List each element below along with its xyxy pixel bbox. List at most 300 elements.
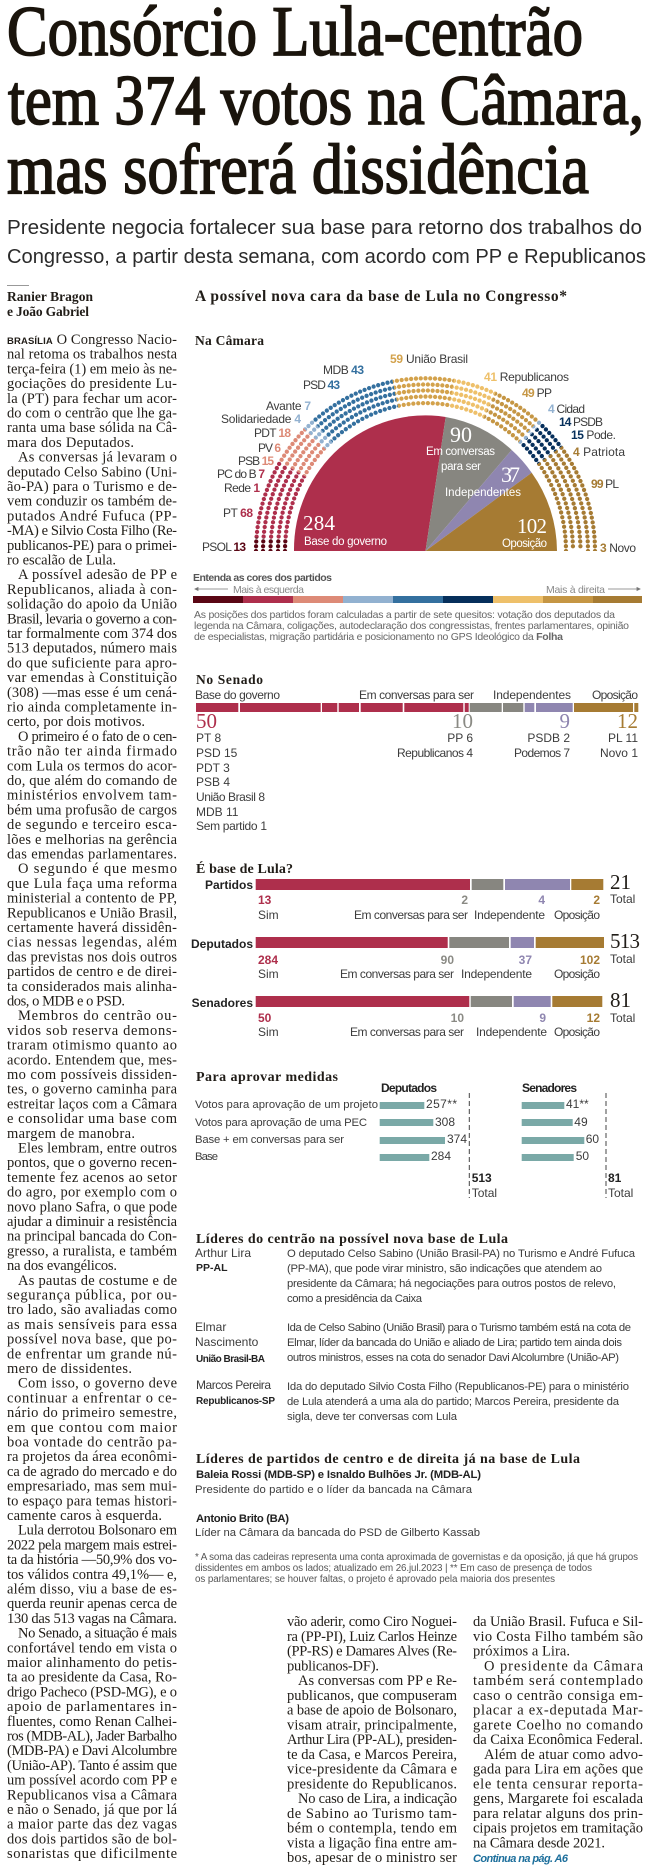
article column 1: querda reunir apenas cerca de — [7, 1596, 177, 1612]
panel: para aprovar medidas: Senadores — [522, 1081, 577, 1095]
article column 1: ministérios envolvem tam- — [7, 788, 177, 804]
footnote: * A soma das cadeiras representa uma conta aproximada de governistas e da oposição, já que há grupos — [195, 1552, 638, 1563]
row: deputados: Independente — [461, 967, 532, 981]
panel: para aprovar medidas: Votos para aprovação de uma PEC — [195, 1117, 367, 1129]
party labels around the hemicycle: 14 PSDB — [559, 415, 603, 429]
panel: no Senado: PP 6 — [447, 731, 473, 745]
article column 1: vem conduzir os também de- — [7, 494, 177, 510]
article column 1: na principal bancada do Con- — [7, 1229, 177, 1245]
article column 1: putados André Fufuca (PP- — [7, 508, 177, 524]
panel: líderes do centrão: sigla, deve ter conversas com Lula — [287, 1411, 458, 1423]
panel: no Senado: PSD 15 — [196, 746, 238, 760]
pie labels: Base do governo — [304, 536, 387, 548]
article column 3: O presidente da Câmara — [484, 1658, 644, 1674]
panel: no Senado: Em conversas para ser — [359, 688, 474, 702]
row: deputados: Total — [610, 952, 635, 966]
headline — [7, 0, 644, 209]
panel: líderes do centrão: O deputado Celso Sabino (União Brasil-PA) no Turismo e André Fufuca — [287, 1248, 636, 1260]
article column 2: As conversas com PP e Re- — [298, 1673, 457, 1689]
article column 1: continuar a enfrentar o ce- — [7, 1390, 177, 1406]
article column 1: das emendas parlamentares. — [7, 846, 177, 862]
article column 1: Republicanos visa a Câmara — [7, 1787, 178, 1803]
panel: líderes do centrão: de Lula atenderá a uma ala do partido; Marcos Pereira, presidente da — [287, 1396, 620, 1408]
article column 1: certamente haverá dissidên- — [7, 920, 177, 936]
panel: no Senado: 50 — [196, 709, 217, 733]
article column 1: -MA) e Silvio Costa Filho (Re- — [7, 523, 177, 539]
panel: no Senado — [195, 672, 638, 833]
pie labels: 284 — [303, 511, 336, 535]
footnote: dissidentes em ambos os lados; atualizado em 26.jul.2023 | ** Em caso de presença de todos — [195, 1563, 592, 1574]
article column 1: (MDB-PA) e Davi Alcolumbre — [7, 1743, 177, 1759]
article column 1: ta da história —50,9% dos vo- — [7, 1552, 177, 1568]
row: senadores: Total — [610, 1011, 635, 1025]
article column 1: O segundo é que mesmo — [18, 861, 177, 877]
article column 3 — [473, 1614, 644, 1851]
article column 1: gresso, a ruralista, e também — [7, 1243, 178, 1259]
article column 1: ros (MDB-AL), Jader Barbalho — [7, 1728, 177, 1744]
deck subtitle: Congresso, a partir desta semana, com acordo com PP e Republicanos — [7, 246, 646, 268]
panel: líderes do centrão: União Brasil-BA — [196, 1354, 265, 1365]
panel: líderes de partidos — [195, 1452, 580, 1539]
panel: líderes do centrão: Marcos Pereira — [196, 1378, 271, 1392]
panel: no Senado: União Brasil 8 — [196, 790, 265, 804]
article column 3: placar a ex-deputada Mar- — [473, 1702, 643, 1718]
bars: senadores: 49 — [574, 1115, 588, 1129]
panel: líderes de partidos: Líderes de partidos de centro e de direita já na base de Lula — [196, 1452, 580, 1467]
row: deputados: 90 — [441, 953, 454, 967]
row: partidos: Independente — [474, 908, 545, 922]
panel: é base de Lula: É base de Lula? — [196, 860, 293, 877]
article column 2: Arthur Lira (PP-AL), presiden- — [287, 1732, 457, 1748]
article column 1: novo plano Safra, o que pode — [7, 1199, 177, 1215]
article column 2: vista a ligação fina entre am- — [287, 1835, 457, 1851]
legend: party colours — [193, 572, 642, 643]
article column 1: tes, o governo caminha para — [7, 1082, 178, 1098]
article column 1: fluentes, como Renan Calhei- — [7, 1714, 177, 1730]
bars: deputados: 513 — [472, 1171, 492, 1185]
panel: no Senado: 9 — [560, 709, 570, 733]
article column 1: trão não ter ainda firmado — [7, 744, 177, 760]
article column 1: margem de manobra. — [7, 1126, 135, 1142]
article column 1: possível nova base, que po- — [7, 1332, 177, 1348]
panel: no Senado: Base do governo — [195, 688, 280, 702]
article column 1: 130 das 513 vagas na Câmara. — [7, 1611, 177, 1627]
article column 1: Lula derrotou Bolsonaro em — [18, 1523, 178, 1539]
article column 2: visam atrair, principalmente, — [287, 1717, 457, 1733]
panel: líderes do centrão: Ida do deputado Silvio Costa Filho (Republicanos-PE) para o ministério — [287, 1381, 629, 1393]
row: partidos: 2 — [461, 893, 468, 907]
pie labels: para ser — [441, 461, 481, 473]
panel: para aprovar medidas: Base — [195, 1151, 218, 1163]
article column 1: ta ao presidente da Casa, Ro- — [7, 1670, 177, 1686]
panel: líderes de partidos: Antonio Brito (BA) — [196, 1513, 289, 1525]
pie labels: Em conversas — [426, 446, 495, 458]
panel: líderes do centrão: Ida de Celso Sabino (União Brasil) para o Turismo também está na cota de — [287, 1322, 631, 1334]
article column 1: de segundo e terceiro esca- — [7, 817, 177, 833]
panel: para aprovar medidas: Base + em conversas para ser — [195, 1134, 344, 1146]
row: senadores: Oposição — [554, 1025, 600, 1039]
article column 3: cipais projetos em tramitação — [473, 1820, 643, 1836]
row: senadores — [192, 988, 635, 1039]
article column 2: presidente do Republicanos. — [287, 1776, 457, 1792]
party labels around the hemicycle: PV 6 — [258, 441, 281, 455]
article column 3: vio Costa Filho também são — [473, 1629, 643, 1645]
footnote: os parlamentares; se houver faltas, o projeto é aprovado pela maioria dos presentes — [195, 1574, 555, 1585]
panel: líderes do centrão: Republicanos-SP — [196, 1396, 275, 1407]
article column 3: garete Coelho no comando — [473, 1717, 643, 1733]
row: senadores: 50 — [258, 1011, 272, 1025]
article column 1: maior alinhamento do petis- — [7, 1655, 177, 1671]
row: partidos: 2 — [593, 893, 600, 907]
bars: senadores: 81 — [608, 1171, 622, 1185]
article column 2: a base de apoio de Bolsonaro, — [287, 1702, 457, 1718]
article column 1: acordo. Entendem que, mes- — [7, 1052, 177, 1068]
party labels around the hemicycle: Solidariedade 4 — [221, 412, 301, 426]
pie labels: Independentes — [445, 487, 521, 499]
article column 1: (308) —mas esse é um cená- — [7, 685, 177, 701]
article column 1: na dos evangélicos. — [7, 1258, 117, 1274]
legend: party colours: Mais à esquerda — [233, 584, 304, 596]
panel: no Senado: No Senado — [196, 672, 263, 687]
article column 1: traram otimismo quanto ao — [7, 1038, 177, 1054]
byline — [7, 285, 93, 319]
article column 2: vão aderir, como Ciro Noguei- — [287, 1614, 457, 1630]
row: deputados: 284 — [258, 953, 278, 967]
article column 2: vice-presidente da Câmara e — [287, 1762, 457, 1778]
article column 1: to espaço para temas histori- — [7, 1493, 177, 1509]
legend: party colours: Mais à direita — [546, 584, 605, 596]
article column 1: mara dos Deputados. — [7, 435, 134, 451]
article column 1: do, que além do comando de — [7, 773, 177, 789]
panel: no Senado: PDT 3 — [196, 761, 230, 775]
article column 2: (PP-RS) e Damares Alves (Re- — [287, 1644, 457, 1660]
article column 1: 513 deputados, número mais — [7, 641, 177, 657]
row: senadores: Sim — [258, 1025, 279, 1039]
legend: party colours: Entenda as cores dos partidos — [193, 572, 332, 584]
footnote — [195, 1552, 638, 1585]
article column 3: caso o centrão consiga em- — [473, 1688, 643, 1704]
article column 1: do com o centrão que lhe ga- — [7, 406, 177, 422]
legend: party colours: legenda na Câmara, coligações, autodeclaração dos congressistas, frentes parlamentares, opinião — [194, 620, 629, 632]
article column 2: publicanos, que compuseram — [287, 1688, 458, 1704]
article column 1: ajudar a diminuir a resistência — [7, 1214, 178, 1230]
article column 1: gociações do presidente Lu- — [7, 376, 177, 392]
panel: líderes do centrão: Elmar — [195, 1320, 226, 1334]
article column 1: confortável tendo em vista o — [7, 1640, 177, 1656]
byline: e João Gabriel — [7, 304, 89, 319]
article column 2: publicanos-DF). — [287, 1658, 379, 1674]
panel: para aprovar medidas: Deputados — [381, 1081, 437, 1095]
article column 2: de Sabino ao Turismo tam- — [287, 1806, 457, 1822]
row: deputados — [191, 929, 640, 981]
article column 1: ro escalão de Lula. — [7, 552, 116, 568]
panel: no Senado: Republicanos 4 — [397, 746, 473, 760]
party labels around the hemicycle: 4 Patriota — [573, 445, 625, 459]
article column 1: deputado Celso Sabino (Uni- — [7, 464, 177, 480]
legend: party colours: As posições dos partidos foram calculadas a partir de sete quesitos: votação dos deputados da — [194, 609, 615, 621]
bars: deputados: 374 — [447, 1132, 467, 1146]
article column 3: gada para Lira em ações que — [473, 1762, 643, 1778]
article column 1: A possível adesão de PP e — [18, 567, 177, 583]
row: partidos: 21 — [610, 870, 631, 894]
row: deputados: Sim — [258, 967, 279, 981]
panel: líderes do centrão: Elmar, líder da bancada do União e aliado de Lira; partido tem ainda dois — [287, 1337, 622, 1349]
row: partidos: Total — [610, 892, 635, 906]
article column 1: segurança pública, por ou- — [7, 1288, 177, 1304]
article column 1: nal retoma os trabalhos nesta — [7, 347, 178, 363]
article column 1: empresariado, mas sem mui- — [7, 1479, 177, 1495]
row: deputados: Oposição — [554, 967, 600, 981]
party labels around the hemicycle: PSOL 13 — [202, 540, 246, 554]
infographic title: A possível nova cara da base de Lula no Congresso* — [195, 288, 567, 305]
article column 3: próximos a Lira. — [473, 1644, 570, 1660]
article column 2 — [287, 1614, 458, 1866]
article column 1: ministerial a contento de PP, — [7, 891, 177, 907]
article column 1: tar formalmente com 374 dos — [7, 626, 177, 642]
bars: senadores: 60 — [586, 1132, 599, 1146]
article column 1: temente fez acenos ao setor — [7, 1170, 177, 1186]
bars: senadores: 50 — [576, 1149, 589, 1163]
article column 1: certo, por dois motivos. — [7, 714, 145, 730]
article column 1: tos válidos contra 49,1%— e, — [7, 1567, 177, 1583]
row: partidos: Em conversas para ser — [354, 908, 468, 922]
article column 2: bos, apesar de o ministro ser — [287, 1850, 457, 1866]
party labels around the hemicycle: 4 Cidad — [548, 402, 585, 416]
article column 3: para relatar alguns dos prin- — [473, 1806, 643, 1822]
panel: no Senado: 10 — [452, 709, 473, 733]
party labels around the hemicycle: 59 União Brasil — [390, 352, 468, 366]
row: deputados: Deputados — [191, 937, 253, 951]
article column 3: ele tenta censurar reporta- — [473, 1776, 643, 1792]
party labels around the hemicycle: PSB 15 — [238, 454, 274, 468]
article column 3: na Câmara desde 2021. — [473, 1835, 605, 1851]
party labels around the hemicycle: PT 68 — [223, 506, 253, 520]
party labels around the hemicycle — [202, 352, 636, 555]
article column 1: camente caros à esquerda. — [7, 1508, 162, 1524]
article column 1: mo com possíveis dissiden- — [7, 1067, 177, 1083]
article column 1: drigo Pacheco (PSD-MG), e o — [7, 1684, 177, 1700]
row: partidos: 13 — [258, 893, 272, 907]
article column 2: No caso de Lira, a indicação — [298, 1791, 457, 1807]
row: deputados: 37 — [519, 953, 532, 967]
deck subtitle: Presidente negocia fortalecer sua base para retorno dos trabalhos do — [7, 217, 642, 239]
party labels around the hemicycle: Avante 7 — [266, 399, 311, 413]
article column 1: Republicanos, aliada à con- — [7, 582, 177, 598]
article column 1: em que contou com maior — [7, 1420, 177, 1436]
article column 2: te da Casa, e Marcos Pereira, — [287, 1747, 457, 1763]
article column 2: bém o contempla, tendo em — [287, 1820, 458, 1836]
panel: líderes do centrão: PP-AL — [196, 1262, 228, 1274]
article column 1: e consolidar uma base com — [7, 1111, 178, 1127]
article column 1: As conversas já levaram o — [18, 450, 177, 466]
bars: deputados: 308 — [435, 1115, 455, 1129]
panel: no Senado: PL 11 — [608, 731, 638, 745]
article column 1: Brasil, levaria o governo a con- — [7, 611, 177, 627]
article column 1: terça-feira (1) em meio às ne- — [7, 361, 177, 377]
article column 1: mero de dissidentes. — [7, 1361, 132, 1377]
panel: no Senado: Oposição — [592, 688, 638, 702]
article column 3: gens, Margarete foi escalada — [473, 1791, 644, 1807]
panel: no Senado: MDB 11 — [196, 805, 239, 819]
article column 1: publicanos-PE) para o primei- — [7, 538, 177, 554]
party labels around the hemicycle: 41 Republicanos — [484, 370, 569, 384]
article column 1: Com isso, o governo deve — [18, 1376, 177, 1392]
pie labels: Oposição — [502, 538, 547, 550]
panel: para aprovar medidas: Votos para aprovação de um projeto — [195, 1099, 378, 1111]
article column 1: a maior parte das dez vagas — [7, 1817, 177, 1833]
row: senadores: Em conversas para ser — [350, 1025, 464, 1039]
section heading: na Câmara: Na Câmara — [195, 333, 264, 348]
article column 1: do que suficiente para apro- — [7, 655, 177, 671]
legend: party colours: de especialistas, migração partidária e posicionamento no GPS Ideológico da Folha — [194, 631, 563, 643]
article column 1: as mais sensíveis para essa — [7, 1317, 178, 1333]
bars: senadores: 41** — [566, 1097, 589, 1111]
bars: deputados: 257** — [426, 1097, 457, 1111]
party labels around the hemicycle: 15 Pode. — [571, 428, 616, 442]
pie labels: 90 — [450, 422, 472, 447]
party labels around the hemicycle: MDB 43 — [323, 363, 364, 377]
pie labels: 102 — [517, 514, 547, 538]
article column 3: da União Brasil. Fufuca e Sil- — [473, 1614, 643, 1630]
panel: no Senado: PSDB 2 — [527, 731, 570, 745]
party labels around the hemicycle: PSD 43 — [303, 378, 340, 392]
bars: deputados: Total — [472, 1186, 497, 1200]
article column 1: com Lula os termos do acor- — [7, 758, 177, 774]
article column 1: O primeiro é o fato de o cen- — [18, 729, 177, 745]
row: partidos: Oposição — [554, 908, 600, 922]
article column 1: dos dois partidos são de bol- — [7, 1831, 177, 1847]
party labels around the hemicycle: 49 PP — [522, 386, 552, 400]
row: partidos: Partidos — [205, 878, 253, 892]
row: deputados: 102 — [580, 953, 600, 967]
panel: líderes do centrão: Líderes do centrão na possível nova base de Lula — [196, 1232, 508, 1247]
article column 1: nário do primeiro semestre, — [7, 1405, 177, 1421]
article column 1: ca de agrado do mercado e do — [7, 1464, 177, 1480]
article column 1: As pautas de costume e de — [18, 1273, 177, 1289]
panel: no Senado: Novo 1 — [600, 746, 638, 760]
article column 1: que Lula faça uma reforma — [7, 876, 178, 892]
article column 1: Membros do centrão ou- — [18, 1008, 177, 1024]
article column 1: ranta uma base sólida na Câ- — [7, 420, 177, 436]
article column 1: além disso, viu a base de es- — [7, 1582, 177, 1598]
article column 1: 2022 pela margem mais estrei- — [7, 1537, 177, 1553]
article column 1 — [7, 332, 178, 1862]
panel: no Senado: PT 8 — [196, 731, 221, 745]
row: senadores: Independente — [476, 1025, 547, 1039]
article column 1: pontos, que o governo recen- — [7, 1155, 177, 1171]
article column 1: ão-PA) para o Turismo e de- — [7, 479, 177, 495]
panel: líderes do centrão — [195, 1232, 636, 1423]
row: partidos — [205, 870, 635, 922]
party labels around the hemicycle: PDT 18 — [254, 426, 291, 440]
article column 1: boa vontade do centrão pa- — [7, 1434, 177, 1450]
panel: líderes de partidos: Líder na Câmara da bancada do PSD de Gilberto Kassab — [195, 1527, 480, 1539]
row: senadores: 9 — [539, 1011, 546, 1025]
article column 1: estreitar laços com a Câmara — [7, 1096, 178, 1112]
bars: senadores — [522, 1093, 633, 1200]
panel: líderes do centrão: Nascimento — [195, 1335, 259, 1349]
chart: central pie of blocs — [294, 415, 557, 551]
panel: líderes do centrão: como a presidência da Caixa — [287, 1293, 423, 1305]
party labels around the hemicycle: 3 Novo — [600, 541, 636, 555]
panel: líderes do centrão: Arthur Lira — [195, 1246, 251, 1260]
article column 1: cias nessas legendas, além — [7, 935, 178, 951]
article column 1: (União-AP). Tanto é assim que — [7, 1758, 177, 1774]
panel: no Senado: Independentes — [493, 688, 571, 702]
article column 1: tro lado, são avaliadas como — [7, 1302, 177, 1318]
row: senadores: 12 — [587, 1011, 600, 1025]
row: partidos: 4 — [538, 893, 545, 907]
panel: no Senado: Sem partido 1 — [196, 819, 267, 833]
article column 1: lões e melhorias na gerência — [7, 832, 178, 848]
article column 3: da Caixa Econômica Federal. — [473, 1732, 643, 1748]
panel: líderes do centrão: (PP-MA), que pode virar ministro, são indicações que atendem ao — [287, 1263, 602, 1275]
article column 1: partidos de centro e de direi- — [7, 964, 177, 980]
pie labels — [303, 422, 547, 550]
article column 1: la (PT) para fechar um acor- — [7, 391, 177, 407]
article column 1: vidos sob reserva demons- — [7, 1023, 177, 1039]
panel: no Senado: PSB 4 — [196, 775, 230, 789]
panel: no Senado: Podemos 7 — [514, 746, 570, 760]
article column 3: também será contemplado — [473, 1673, 643, 1689]
article column 1: dos, o MDB e o PSD. — [7, 994, 125, 1010]
article column 1: ta considerados mais alinha- — [7, 979, 177, 995]
deck subtitle — [7, 217, 646, 268]
panel: líderes de partidos: Baleia Rossi (MDB-SP) e Isnaldo Bulhões Jr. (MDB-AL) — [196, 1469, 481, 1481]
panel: líderes do centrão: outros ministros, esses na cota do senador Davi Alcolumbre (União-AP) — [287, 1352, 619, 1364]
panel: no Senado: 12 — [617, 709, 638, 733]
row: senadores: 81 — [610, 988, 631, 1012]
row: deputados: Em conversas para ser — [340, 967, 454, 981]
bars: deputados: 284 — [431, 1149, 451, 1163]
article column 1: das previstas nos dois outros — [7, 949, 177, 965]
bars: deputados — [380, 1093, 497, 1200]
row: senadores: Senadores — [192, 996, 253, 1010]
article column 1: um possível acordo com PP e — [7, 1773, 177, 1789]
article column 1: Eles lembram, entre outros — [18, 1140, 177, 1156]
article column 1: Republicanos e União Brasil, — [7, 905, 177, 921]
panel: líderes do centrão: presidente da Câmara; há negociações para outros postos de relevo, — [287, 1278, 616, 1290]
party labels around the hemicycle: 99 PL — [591, 477, 619, 491]
panel: é base de Lula — [191, 860, 640, 1039]
row: deputados: 513 — [610, 929, 640, 953]
article column 1: ra projetos da área econômi- — [7, 1449, 177, 1465]
byline: Ranier Bragon — [7, 289, 93, 304]
chart: hemicycle of party seats — [270, 390, 580, 551]
article column 1: sonaristas que dificilmente — [7, 1846, 177, 1862]
article column 1: bém uma profusão de cargos — [7, 802, 177, 818]
article column 1: var emendas à Constituição — [7, 670, 177, 686]
article column 1: BRASÍLIA O Congresso Nacio- — [7, 332, 177, 348]
bars: senadores: Total — [608, 1186, 633, 1200]
article column 1: solidação do apoio da União — [7, 597, 177, 613]
article column 3: Além de atuar como advo- — [484, 1747, 643, 1763]
party labels around the hemicycle: PC do B 7 — [217, 467, 265, 481]
pie labels: 37 — [501, 462, 520, 487]
article column 1: No Senado, a situação é mais — [18, 1626, 177, 1642]
article column 1: rio ainda completamente in- — [7, 700, 177, 716]
panel: líderes de partidos: Presidente do partido e o líder da bancada na Câmara — [195, 1484, 473, 1496]
article column 1: de enfrentar um grande nú- — [7, 1346, 177, 1362]
party labels around the hemicycle: Rede 1 — [224, 481, 260, 495]
row: partidos: Sim — [258, 908, 279, 922]
panel: para aprovar medidas — [195, 1070, 633, 1200]
article column 1: e não o Senado, já que por lá — [7, 1802, 178, 1818]
article column 1: do agro, por exemplo com o — [7, 1185, 177, 1201]
row: senadores: 10 — [451, 1011, 464, 1025]
article column 2: ra (PP-PI), Luiz Carlos Heinze — [287, 1629, 457, 1645]
continuation link: Continua na pág. A6 — [473, 1853, 569, 1865]
